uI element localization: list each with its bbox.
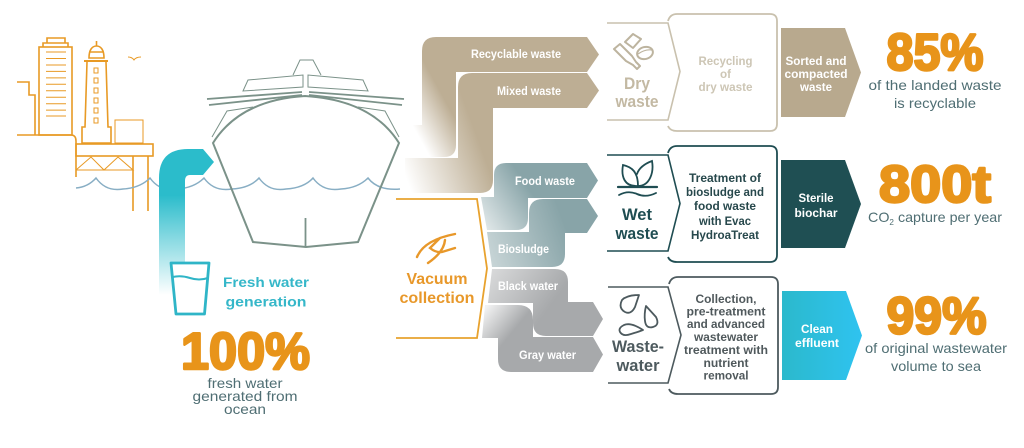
stat text: CO2 capture: capture per year bbox=[894, 209, 1002, 225]
panel: collection and treatment: pre-treatment bbox=[686, 306, 766, 318]
icon: three droplets bbox=[620, 295, 657, 335]
panel: treatment of biosludge: biosludge and bbox=[686, 187, 764, 199]
stat: 99%: 99% bbox=[886, 288, 986, 346]
arrow: sterile biochar bbox=[781, 160, 861, 248]
arrow: sorted and compacted waste: Sorted and bbox=[786, 56, 846, 68]
panel: treatment of biosludge: Treatment of bbox=[689, 173, 761, 185]
label: vacuum collection: Vacuum bbox=[406, 271, 468, 288]
stat text: fresh water: ocean bbox=[224, 401, 266, 417]
label: wastewater bbox=[612, 337, 664, 375]
label: dry waste: Dry bbox=[624, 74, 650, 93]
flow: black water bbox=[488, 269, 603, 336]
label: wastewater: water bbox=[616, 356, 660, 375]
stat: 800t: 800t bbox=[879, 156, 991, 214]
label: wet waste: waste bbox=[615, 224, 658, 243]
lighthouse bbox=[82, 41, 111, 143]
flow: recyclable waste: Recyclable waste bbox=[471, 49, 561, 61]
flow: biosludge: Biosludge bbox=[498, 244, 549, 256]
ship hull bbox=[213, 96, 399, 247]
arrow: clean effluent: Clean bbox=[801, 324, 833, 336]
flow: recyclable waste bbox=[412, 37, 599, 157]
flow: gray water: Gray water bbox=[519, 350, 576, 362]
icon: glass of water bbox=[171, 263, 209, 314]
arrow: clean effluent bbox=[782, 291, 862, 380]
label: wet waste: Wet bbox=[622, 205, 652, 224]
panel: treatment of biosludge: food waste bbox=[694, 201, 756, 213]
sea waves bbox=[76, 178, 400, 190]
panel: wet waste bbox=[607, 155, 680, 251]
arrow: sorted and compacted waste: compacted bbox=[784, 69, 848, 81]
icon: vacuum swirl bbox=[417, 234, 455, 263]
label: vacuum collection bbox=[400, 271, 474, 307]
icon: bottle and packaging bbox=[614, 34, 654, 69]
panel: collection and treatment: nutrient bbox=[704, 358, 749, 370]
label: wet waste bbox=[615, 205, 658, 243]
ship keel bbox=[304, 218, 306, 247]
flow: mixed waste: Mixed waste bbox=[497, 86, 561, 98]
tower building bbox=[17, 38, 72, 135]
label: vacuum collection: collection bbox=[400, 290, 474, 307]
bird bbox=[128, 57, 141, 60]
flow: food waste bbox=[481, 163, 598, 230]
stat text: landed waste bbox=[868, 77, 1002, 111]
label: wastewater: Waste- bbox=[612, 337, 664, 356]
panel: collection and treatment bbox=[669, 277, 778, 394]
stat text: fresh water: generated from bbox=[192, 388, 298, 404]
stat text: CO2 capture: CO bbox=[868, 209, 889, 225]
flow: mixed waste bbox=[405, 73, 599, 193]
stat text: landed waste: of the landed waste bbox=[868, 77, 1002, 93]
panel: recycling of dry waste: of bbox=[720, 69, 731, 81]
panel: collection and treatment: wastewater bbox=[693, 332, 759, 344]
panel: treatment of biosludge: with Evac bbox=[698, 216, 752, 228]
stat text: fresh water: fresh water bbox=[208, 375, 283, 391]
label: fresh water generation bbox=[223, 274, 310, 310]
panel: recycling of dry waste: dry waste bbox=[698, 82, 752, 94]
panel: collection and treatment: and advanced bbox=[687, 319, 765, 331]
panel: collection and treatment: Collection, bbox=[696, 294, 756, 306]
panel: collection and treatment: treatment with bbox=[684, 345, 768, 357]
fresh water intake pipe bbox=[159, 149, 214, 196]
stat text: fresh water bbox=[192, 375, 298, 417]
stat text: wastewater volume: volume to sea bbox=[891, 358, 981, 374]
panel: recycling of dry waste bbox=[668, 14, 777, 131]
stat text: CO2 capture: 2 bbox=[889, 218, 895, 227]
stat text: landed waste: is recyclable bbox=[894, 95, 976, 111]
illustration: harbour skyline bbox=[17, 38, 153, 211]
flow: food waste: Food waste bbox=[515, 176, 575, 188]
panel: treatment of biosludge: HydroaTreat bbox=[691, 230, 759, 242]
panel: dry waste bbox=[607, 23, 680, 120]
label: dry waste: waste bbox=[615, 92, 658, 111]
ship rails bbox=[207, 92, 404, 105]
panel: treatment of biosludge bbox=[668, 146, 777, 262]
panel: wastewater bbox=[608, 287, 681, 383]
label: fresh water generation: generation bbox=[226, 294, 306, 310]
label: dry waste bbox=[615, 74, 658, 111]
panel: recycling of dry waste: Recycling bbox=[698, 56, 752, 68]
arrow: clean effluent: effluent bbox=[795, 338, 839, 350]
stat: 100%: 100% bbox=[181, 323, 310, 381]
arrow: sorted and compacted waste bbox=[781, 28, 861, 117]
label: fresh water generation: Fresh water bbox=[223, 274, 310, 290]
pipe fade bbox=[159, 195, 185, 295]
ship bbox=[207, 60, 404, 247]
stat: 85%: 85% bbox=[886, 24, 984, 82]
arrow: sorted and compacted waste: waste bbox=[799, 82, 832, 94]
flow: black water: Black water bbox=[498, 281, 558, 293]
panel: vacuum collection bbox=[396, 199, 487, 338]
stat text: wastewater volume bbox=[865, 340, 1007, 374]
flow: biosludge bbox=[487, 199, 598, 267]
arrow: sterile biochar: Sterile bbox=[798, 193, 834, 205]
arrow: sterile biochar: biochar bbox=[794, 208, 838, 220]
icon: leaves on water bbox=[618, 161, 657, 196]
ship bridge and decks bbox=[212, 60, 399, 137]
flow: gray water bbox=[482, 305, 603, 372]
pier platform bbox=[17, 120, 153, 211]
stat text: wastewater volume: of original wastewater bbox=[865, 340, 1007, 356]
panel: collection and treatment: removal bbox=[704, 370, 748, 382]
